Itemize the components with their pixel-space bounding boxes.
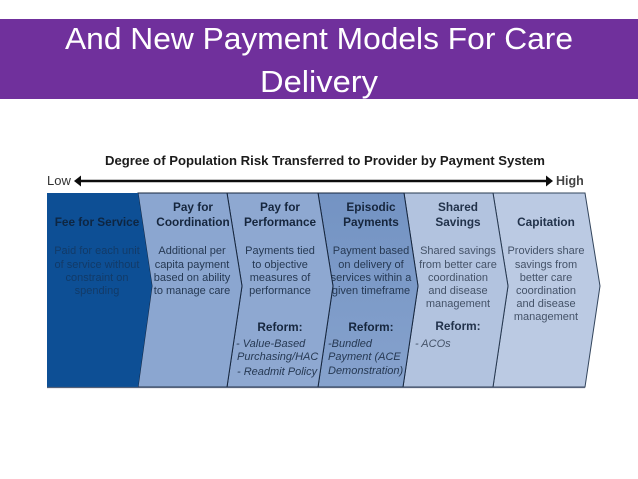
column: fee for service: Paid for each unit [54, 245, 140, 257]
column: pay for performance: Performance [244, 215, 317, 229]
column: fee for service [47, 193, 152, 387]
column: shared savings: - ACOs [415, 338, 451, 350]
column: shared savings: and disease [428, 285, 488, 297]
column: pay for performance: Pay for [260, 200, 300, 214]
column: capitation: management [514, 311, 578, 323]
column: shared savings [403, 193, 508, 387]
risk axis arrow [47, 173, 584, 188]
column: shared savings: Shared [438, 200, 478, 214]
column: pay for coordination [138, 193, 242, 387]
column: pay for performance: - Value-Based [236, 338, 306, 350]
column: episodic payments: Episodic [346, 200, 396, 214]
column: episodic payments: -Bundled [328, 338, 373, 350]
column: shared savings: coordination [428, 272, 488, 284]
column: pay for performance: Payments tied [245, 245, 315, 257]
column: capitation [493, 193, 600, 387]
column: capitation: and disease [516, 298, 576, 310]
column: fee for service: spending [75, 285, 119, 297]
column: capitation: coordination [516, 285, 576, 297]
column: episodic payments: Reform: [348, 320, 394, 334]
payment system diagram [47, 153, 600, 388]
column: pay for performance: Reform: [257, 320, 303, 334]
column: capitation: Capitation [517, 215, 575, 229]
column: shared savings: from better care [419, 259, 497, 271]
column: episodic payments: given timeframe [332, 285, 410, 297]
column: episodic payments: Payment (ACE [328, 351, 401, 363]
title: And New Payment Models For Care [65, 21, 573, 56]
column: pay for performance: Purchasing/HAC [237, 351, 318, 363]
column: pay for coordination: Pay for [173, 200, 213, 214]
column: pay for performance: - Readmit Policy [237, 366, 319, 378]
title: Delivery [260, 64, 379, 99]
column: episodic payments: services within a [331, 272, 412, 284]
column: pay for coordination: based on ability [154, 272, 231, 284]
column: capitation: Providers share [507, 245, 585, 257]
column: episodic payments: on delivery of [338, 259, 405, 271]
diagram heading: Degree of Population Risk Transferred to Provider by Payment System [105, 153, 545, 168]
column: pay for coordination: Additional per [158, 245, 226, 257]
column: pay for coordination: Coordination [156, 215, 230, 229]
column: episodic payments: Demonstration) [328, 365, 404, 377]
title banner [0, 19, 638, 99]
column: fee for service: constraint on [66, 272, 128, 284]
column: pay for performance: to objective [252, 259, 308, 271]
column: pay for performance [227, 193, 333, 387]
column: pay for performance: measures of [250, 272, 311, 284]
column: shared savings: management [426, 298, 490, 310]
column: episodic payments [318, 193, 418, 387]
column: pay for coordination: capita payment [155, 259, 229, 271]
column: shared savings: Reform: [435, 319, 481, 333]
column: capitation: better care [520, 272, 572, 284]
column: fee for service: of service without [55, 259, 139, 271]
risk axis arrow: Low [47, 173, 71, 188]
column: fee for service: Fee for Service [55, 215, 140, 229]
column: pay for performance: performance [249, 285, 311, 297]
column: pay for coordination: to manage care [154, 285, 230, 297]
column: episodic payments: Payment based [333, 245, 409, 257]
column: episodic payments: Payments [343, 215, 399, 229]
column: capitation: savings from [515, 259, 577, 271]
column: shared savings: Shared savings [420, 245, 496, 257]
column: shared savings: Savings [435, 215, 481, 229]
risk axis arrow: High [556, 174, 584, 188]
